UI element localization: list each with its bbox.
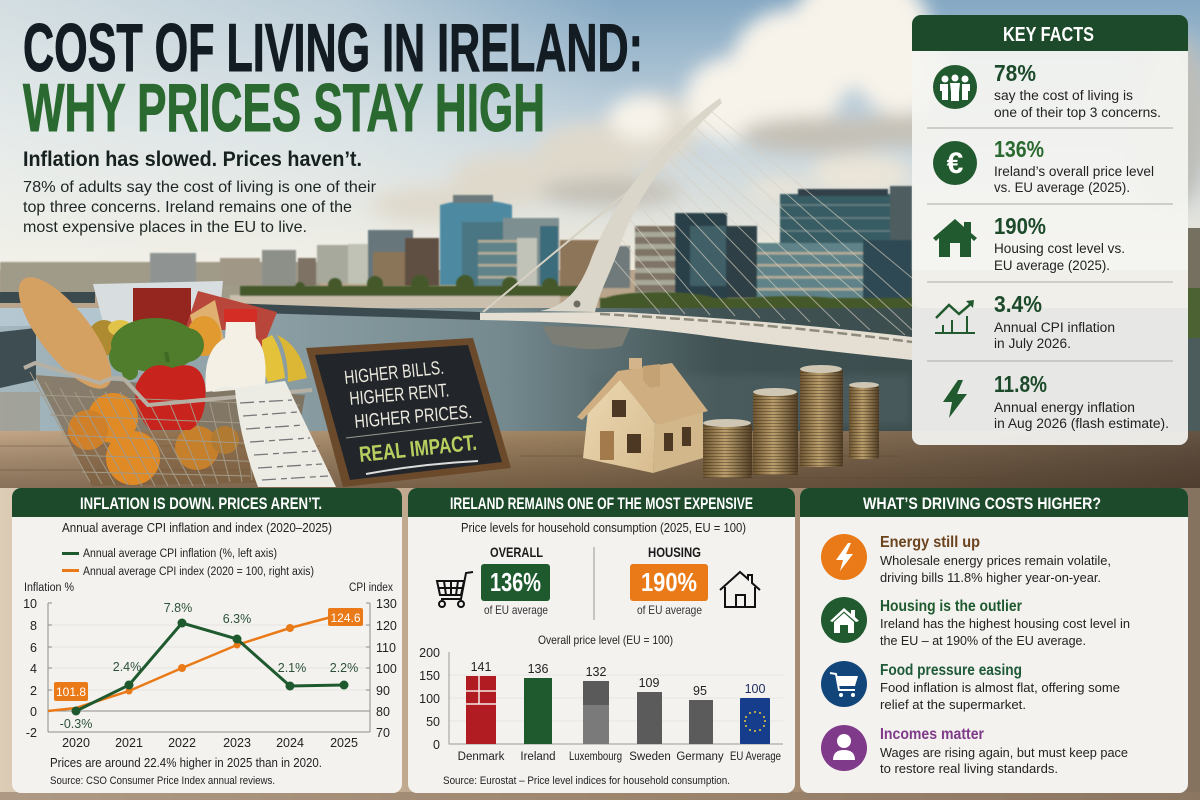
- drivers heading: WHAT’S DRIVING COSTS HIGHER?: [863, 494, 1101, 513]
- line chart: CPI inflation and index: 4: [30, 662, 37, 676]
- stat: housing: 190%: [641, 567, 697, 597]
- stat: overall: of EU average: [484, 603, 548, 617]
- panel: inflation is down: [12, 488, 402, 793]
- driver: housing: the EU – at 190% of the EU average.: [880, 633, 1086, 648]
- bar: Denmark: 141: [471, 660, 491, 674]
- fact: 78%: say the cost of living is: [994, 88, 1133, 103]
- line chart: CPI inflation and index: 2024: [276, 736, 304, 750]
- bar: Denmark: Denmark: [458, 751, 505, 763]
- chart legend: Annual average CPI index (2020 = 100, right axis): [83, 566, 314, 578]
- round glass tower: [440, 200, 512, 285]
- fact: 11.8%: Annual energy inflation: [994, 400, 1135, 415]
- shopping basket with groceries: [3, 264, 336, 487]
- data labels: 2.4%: [113, 660, 141, 674]
- chalkboard sign: [306, 338, 511, 487]
- bar: Germany: 95: [693, 684, 707, 698]
- driver: energy: [821, 534, 1111, 585]
- price levels source: Source: Eurostat – Price level indices for household consumption.: [443, 775, 730, 787]
- right edge scene: [1188, 228, 1200, 288]
- intro text: top three concerns. Ireland remains one of the: [23, 199, 352, 216]
- clouds: [370, 0, 1200, 223]
- stat: housing: HOUSING: [648, 544, 701, 560]
- fact: 78%: one of their top 3 concerns.: [994, 105, 1161, 120]
- line chart: CPI inflation and index: 0: [30, 705, 37, 719]
- driver: food: [821, 661, 1120, 712]
- line chart: CPI inflation and index: 80: [376, 705, 390, 719]
- intro text: [23, 179, 377, 236]
- data labels: -0.3%: [60, 717, 92, 731]
- driver: energy: Energy still up: [880, 534, 980, 551]
- icon: shopping cart: [437, 572, 473, 607]
- driver: housing: Ireland has the highest housing cost level in: [880, 616, 1130, 631]
- bar: Denmark: [458, 660, 505, 763]
- chart legend: [62, 548, 314, 578]
- driver: housing: Housing is the outlier: [880, 598, 1022, 615]
- bar: EU average: EU Average: [730, 751, 781, 763]
- fact: 136%: vs. EU average (2025).: [994, 180, 1130, 195]
- fact: 190%: Housing cost level vs.: [994, 241, 1125, 256]
- driver: food: Food inflation is almost flat, offering some: [880, 680, 1120, 695]
- value tags: 124.6: [330, 611, 361, 625]
- pepper: [135, 365, 205, 430]
- inflation panel heading: INFLATION IS DOWN. PRICES AREN’T.: [80, 494, 322, 513]
- intro text: most expensive places in the EU to live.: [23, 219, 307, 236]
- inflation source: Source: CSO Consumer Price Index annual reviews.: [50, 775, 275, 787]
- line chart: CPI inflation and index: CPI index: [349, 582, 393, 594]
- bar: Luxembourg: 132: [586, 665, 606, 679]
- fact: 78%: 78%: [994, 60, 1036, 86]
- broccoli: [109, 318, 204, 380]
- milk: [205, 322, 266, 392]
- data labels: 6.3%: [223, 612, 251, 626]
- chart legend: Annual average CPI inflation (%, left axis): [83, 548, 277, 560]
- green inflation line: [72, 618, 348, 716]
- rear strut cable: [483, 165, 660, 312]
- line chart: CPI inflation and index: 2025: [330, 736, 358, 750]
- oranges: [88, 393, 138, 443]
- fact: 190%: EU average (2025).: [994, 258, 1110, 273]
- most expensive heading: IRELAND REMAINS ONE OF THE MOST EXPENSIVE: [450, 494, 753, 513]
- driver: incomes: Wages are rising again, but must keep pace: [880, 745, 1128, 760]
- key facts heading: KEY FACTS: [1003, 24, 1094, 46]
- bar chart: overall price level: 100: [419, 692, 440, 706]
- bar: Sweden: 109: [639, 676, 659, 690]
- fact: 3.4%: [935, 291, 1115, 351]
- line chart: CPI inflation and index: 2020: [62, 736, 90, 750]
- line chart: CPI inflation and index: 6: [30, 641, 37, 655]
- fact: 11.8%: 11.8%: [994, 371, 1047, 397]
- panel: key facts: [912, 15, 1188, 445]
- data labels: 7.8%: [164, 601, 192, 615]
- line chart: CPI inflation and index: [23, 582, 397, 750]
- driver: incomes: Incomes matter: [880, 726, 984, 743]
- bar: Sweden: [629, 676, 671, 763]
- coin stacks: [703, 365, 879, 478]
- line chart: CPI inflation and index: 2023: [223, 736, 251, 750]
- title: WHY PRICES STAY HIGH: [23, 70, 545, 146]
- stat: housing: of EU average: [637, 603, 702, 617]
- basket interior shadow: [35, 375, 305, 486]
- stat: overall: OVERALL: [490, 544, 543, 560]
- value tags: 101.8: [56, 685, 86, 699]
- subheading: Inflation has slowed. Prices haven’t.: [23, 148, 362, 171]
- drivers heading: [800, 488, 1188, 517]
- fact: 136%: €: [947, 147, 964, 180]
- line chart: CPI inflation and index: 2022: [168, 736, 196, 750]
- stat: overall: 136%: [490, 567, 541, 597]
- bar: EU average: [730, 682, 781, 763]
- pier: [542, 326, 630, 349]
- fact: 11.8%: [943, 371, 1169, 431]
- bar chart: overall price level: 50: [426, 715, 440, 729]
- value tags: [54, 608, 363, 701]
- data labels: 2.2%: [330, 661, 358, 675]
- line chart: CPI inflation and index: 100: [376, 662, 397, 676]
- inflation panel heading: [12, 488, 402, 517]
- bar chart: overall price level: Overall price level (EU = 100): [538, 633, 673, 647]
- bar: EU average: 100: [745, 682, 765, 696]
- cables: [614, 112, 912, 335]
- line chart: CPI inflation and index: 70: [376, 726, 390, 740]
- fact: 136%: 136%: [994, 136, 1044, 162]
- title: COST OF LIVING IN IRELAND:: [23, 10, 643, 86]
- driver: housing: [821, 597, 1130, 648]
- bar: Germany: Germany: [676, 751, 724, 763]
- driver: incomes: [821, 725, 1128, 776]
- fact: 136%: [933, 136, 1154, 195]
- fact: 190%: [933, 213, 1125, 273]
- stat: housing: [630, 544, 708, 617]
- wooden deck: [0, 431, 1200, 491]
- receipt: [212, 381, 336, 487]
- line chart: CPI inflation and index: 10: [23, 597, 37, 611]
- bridge deck: [480, 312, 912, 360]
- fact: 3.4%: 3.4%: [994, 291, 1042, 317]
- chalkboard sign: HIGHER RENT.: [349, 380, 450, 410]
- fact: 136%: Ireland’s overall price level: [994, 164, 1154, 179]
- driver: energy: Wholesale energy prices remain volatile,: [880, 553, 1111, 568]
- plastic bag and packets: [93, 281, 223, 335]
- stat: overall: [481, 544, 550, 617]
- bar chart: overall price level: [419, 633, 783, 763]
- bar chart: overall price level: 200: [419, 646, 440, 660]
- fact: 3.4%: in July 2026.: [994, 336, 1071, 351]
- right block: [780, 194, 912, 244]
- panel: what's driving costs: [800, 488, 1188, 793]
- inflation chart subtitle: Annual average CPI inflation and index (2020–2025): [62, 521, 332, 535]
- bar: Germany: [676, 684, 724, 763]
- wooden model house: [577, 358, 708, 473]
- line chart: CPI inflation and index: Inflation %: [24, 582, 74, 594]
- trees and quay: [230, 275, 920, 326]
- chalkboard sign: REAL IMPACT.: [358, 430, 478, 467]
- line chart: CPI inflation and index: 8: [30, 619, 37, 633]
- price levels subtitle: Price levels for household consumption (2025, EU = 100): [461, 521, 746, 535]
- panel: most expensive: [408, 488, 795, 793]
- bar chart: overall price level: 150: [419, 669, 440, 683]
- icon: house outline: [720, 572, 760, 607]
- bar: Luxembourg: Luxembourg: [569, 751, 622, 763]
- middle block: [635, 226, 695, 304]
- orange index line: [48, 616, 335, 711]
- bar: Ireland: 136: [528, 662, 548, 676]
- pylon: [540, 98, 722, 312]
- fact: 78%: [933, 60, 1161, 120]
- line chart: CPI inflation and index: 2021: [115, 736, 143, 750]
- far city skyline: [0, 186, 912, 304]
- key facts heading: [912, 15, 1188, 51]
- bread: [3, 264, 127, 402]
- low bridge: [0, 292, 480, 320]
- line chart: CPI inflation and index: 90: [376, 684, 390, 698]
- left quay wall: [0, 328, 36, 388]
- fact: 11.8%: in Aug 2026 (flash estimate).: [994, 416, 1169, 431]
- intro text: 78% of adults say the cost of living is one of their: [23, 179, 377, 196]
- fact: 3.4%: Annual CPI inflation: [994, 320, 1115, 335]
- data labels: 2.1%: [278, 661, 306, 675]
- driver: incomes: to restore real living standards.: [880, 761, 1058, 776]
- inflation takeaway: Prices are around 22.4% higher in 2025 than in 2020.: [50, 755, 322, 770]
- most expensive heading: [408, 488, 795, 517]
- driver: food: relief at the supermarket.: [880, 697, 1026, 712]
- data labels: [60, 601, 358, 731]
- driver: food: Food pressure easing: [880, 662, 1022, 679]
- chalkboard sign: HIGHER PRICES.: [354, 402, 473, 433]
- chalkboard sign: HIGHER BILLS.: [343, 358, 445, 389]
- fact: 190%: 190%: [994, 213, 1046, 239]
- bar chart: overall price level: 0: [433, 738, 440, 752]
- river: [0, 308, 1200, 432]
- bar: Sweden: Sweden: [629, 751, 671, 763]
- bar: Ireland: [520, 662, 556, 763]
- bananas: [262, 335, 285, 382]
- title: [23, 10, 643, 146]
- line chart: CPI inflation and index: -2: [26, 726, 37, 740]
- line chart: CPI inflation and index: 130: [376, 597, 397, 611]
- bar: Ireland: Ireland: [520, 751, 556, 763]
- bar: Luxembourg: [569, 665, 622, 763]
- wire basket: [30, 372, 300, 486]
- line chart: CPI inflation and index: 2: [30, 684, 37, 698]
- line chart: CPI inflation and index: 120: [376, 619, 397, 633]
- driver: energy: driving bills 11.8% higher year-on-year.: [880, 570, 1101, 585]
- line chart: CPI inflation and index: 110: [376, 641, 396, 655]
